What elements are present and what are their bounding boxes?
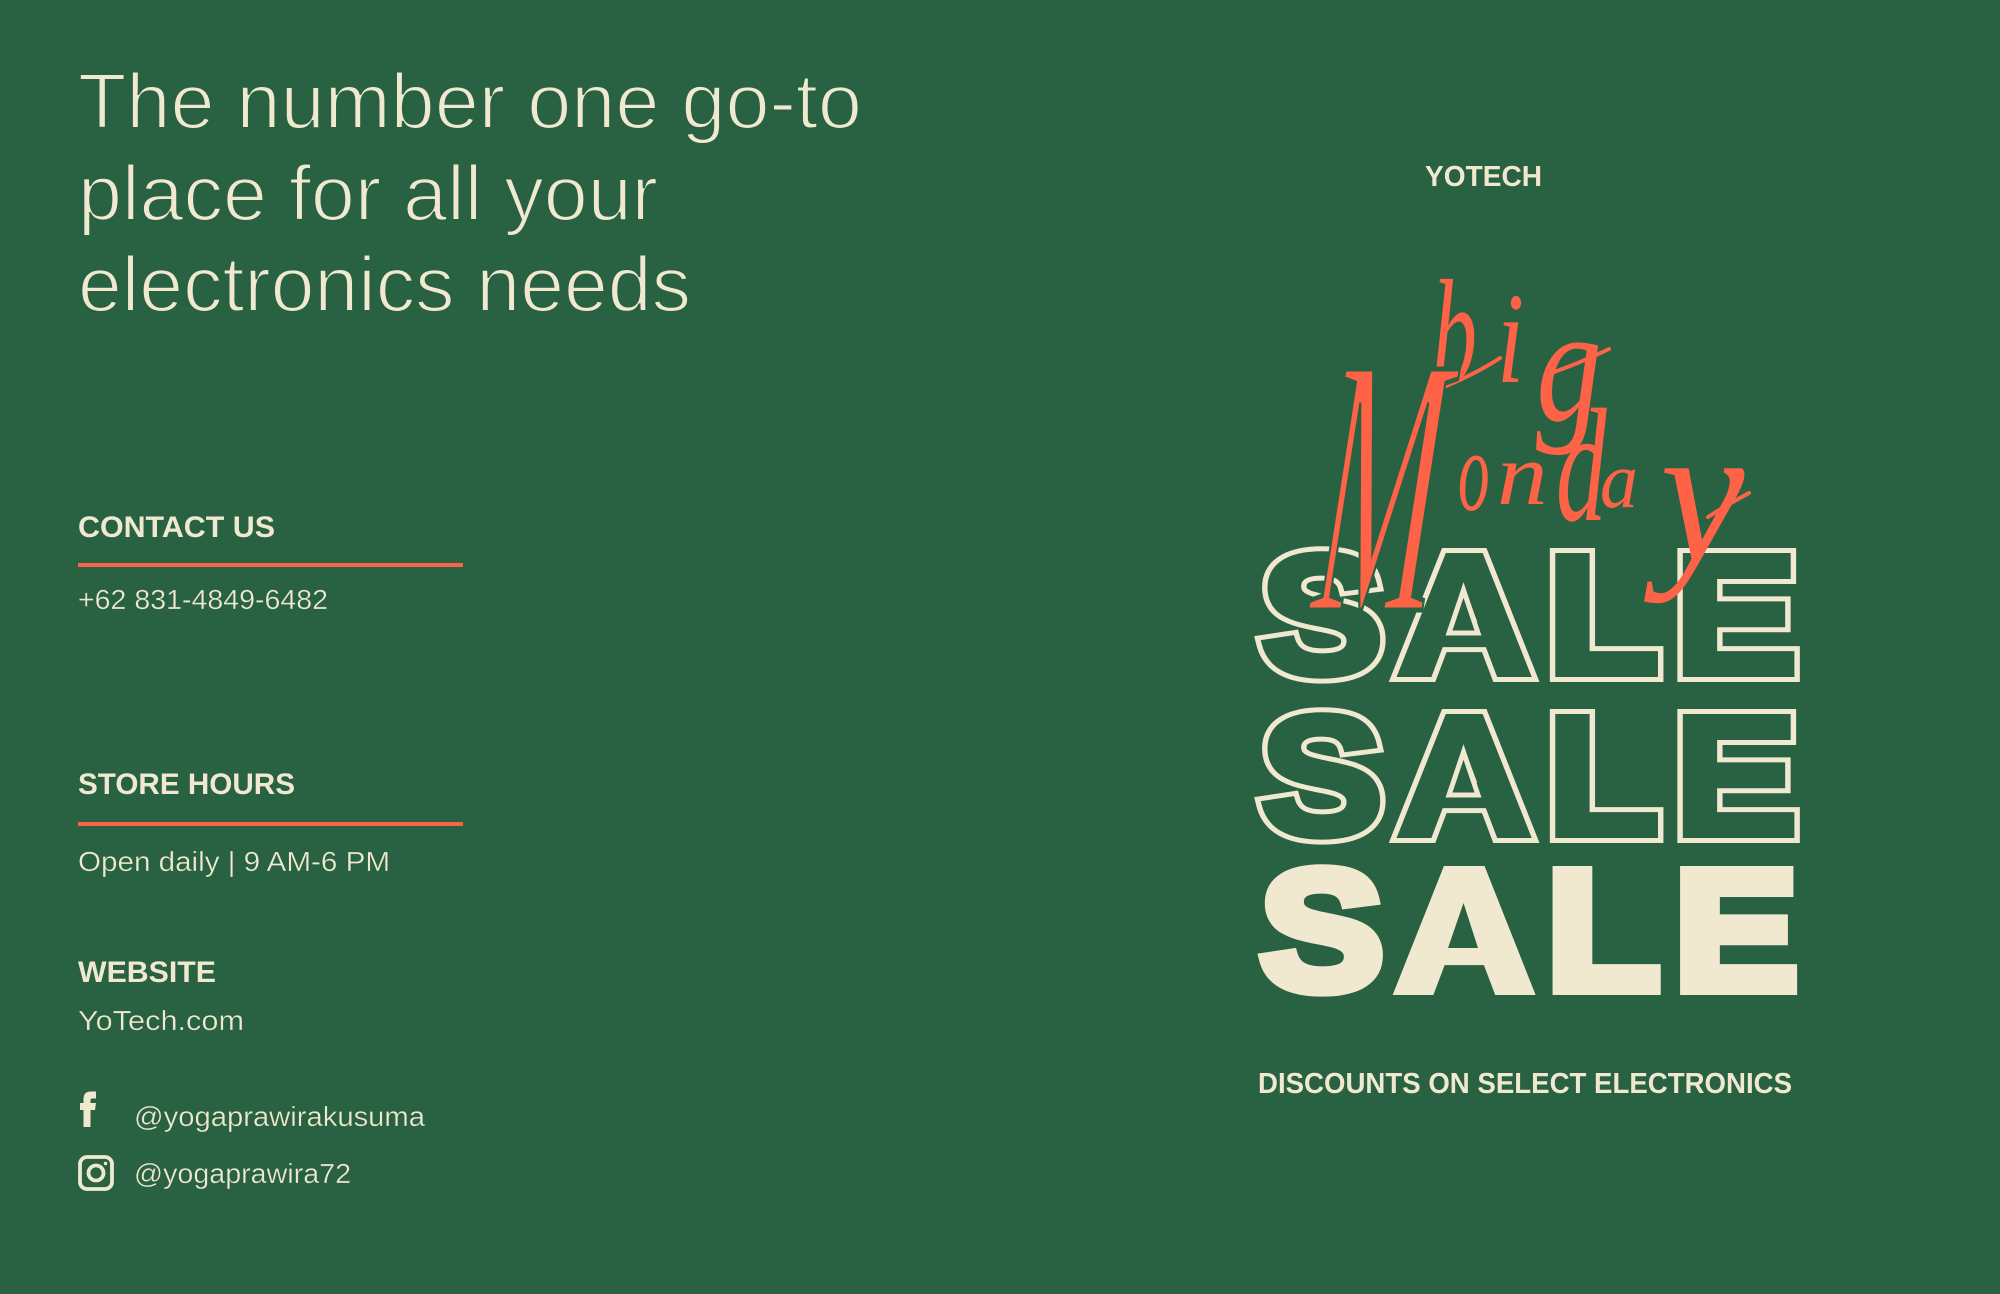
headline: place for all your [78, 149, 658, 237]
brand name: YOTECH [1425, 161, 1542, 193]
script: big: i [1497, 267, 1524, 410]
script: Monday [1301, 281, 1749, 690]
script: big [1432, 250, 1609, 456]
panel: store hours [78, 768, 463, 877]
script: Monday: n [1497, 426, 1548, 523]
panel: website: YoTech.com [78, 1005, 244, 1036]
outlined SALE 1: SALE [1260, 520, 1798, 710]
script: Monday: M [1301, 281, 1469, 690]
icon: facebook [80, 1092, 96, 1127]
icon: instagram [80, 1157, 112, 1189]
script: Monday: d [1556, 377, 1607, 556]
panel: store hours: Open daily | 9 AM-6 PM [78, 846, 390, 877]
panel: website [78, 956, 244, 1036]
headline: electronics needs [78, 240, 691, 328]
panel: contact us: CONTACT US [78, 511, 275, 544]
headline [78, 57, 862, 328]
script: Monday: a [1600, 435, 1638, 524]
outlined SALE 1: SALE [1260, 520, 1798, 710]
instagram handle: @yogaprawira72 [134, 1158, 351, 1189]
panel: contact us: +62 831-4849-6482 [78, 584, 328, 615]
script: big: g [1536, 274, 1602, 456]
tagline: DISCOUNTS ON SELECT ELECTRONICS [1258, 1068, 1792, 1100]
solid SALE: SALE [1260, 835, 1798, 1025]
panel: contact us [78, 511, 463, 615]
panel: store hours: STORE HOURS [78, 768, 295, 801]
script: Monday: y [1643, 383, 1745, 604]
script: Monday: o [1458, 408, 1490, 536]
script: big: b [1432, 250, 1477, 416]
headline: The number one go-to [78, 57, 862, 145]
outlined SALE 2: SALE [1260, 681, 1798, 871]
facebook handle: @yogaprawirakusuma [134, 1101, 425, 1132]
outlined SALE 2: SALE [1260, 681, 1798, 871]
panel: website: WEBSITE [78, 956, 216, 989]
